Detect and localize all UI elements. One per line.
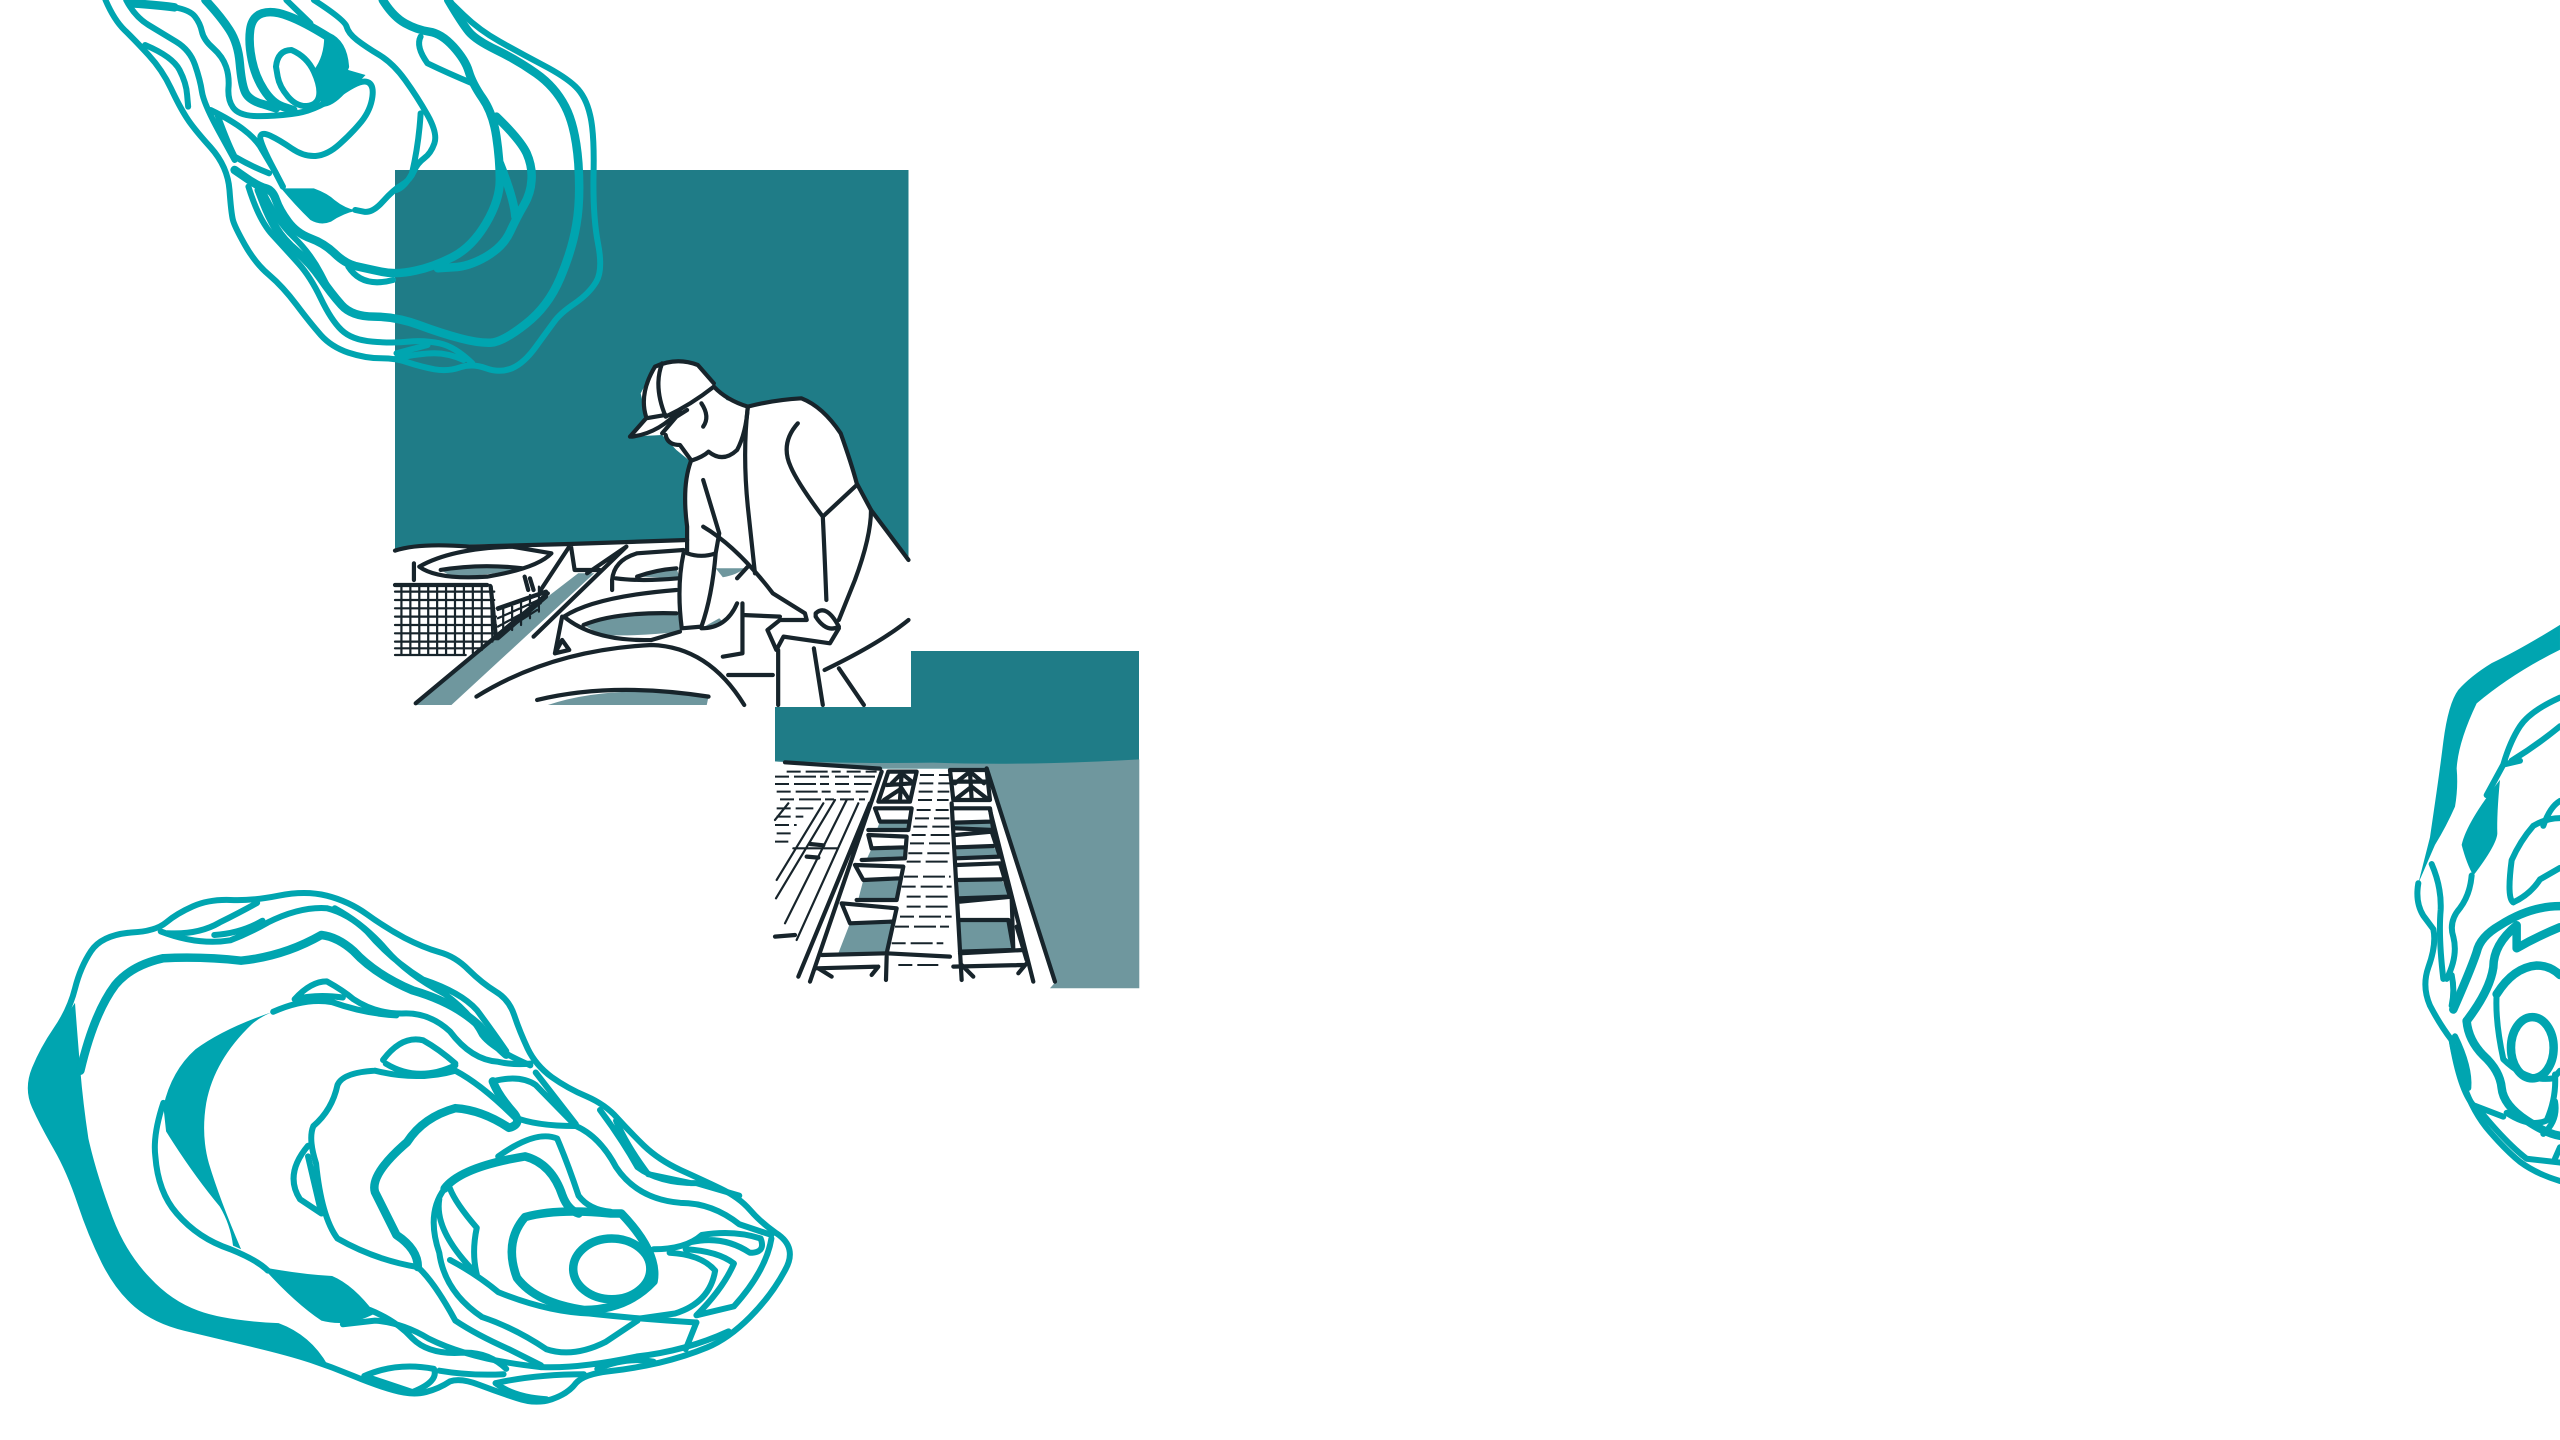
roof hatching xyxy=(775,772,952,965)
water surfaces xyxy=(416,566,744,705)
icon: oyster shell right edge xyxy=(2417,625,2560,1181)
water in windows xyxy=(838,822,1013,953)
tubs xyxy=(395,540,780,705)
oyster centre xyxy=(512,1212,654,1310)
panel: oyster worker illustration xyxy=(395,170,911,707)
white foreground area xyxy=(395,360,911,707)
lower blob xyxy=(262,1267,375,1323)
icon: large oyster shell bottom left xyxy=(31,893,790,1402)
roof trusses xyxy=(878,770,990,802)
inner crescent xyxy=(163,1005,300,1249)
window frames and rails xyxy=(798,768,1055,982)
wire basket xyxy=(395,577,546,655)
worker figure xyxy=(630,361,909,705)
icon: oyster shell top left xyxy=(105,0,600,371)
thick outer crescent xyxy=(31,1003,328,1365)
shell outline xyxy=(31,893,790,1402)
panel: rooftop illustration xyxy=(775,651,1139,988)
